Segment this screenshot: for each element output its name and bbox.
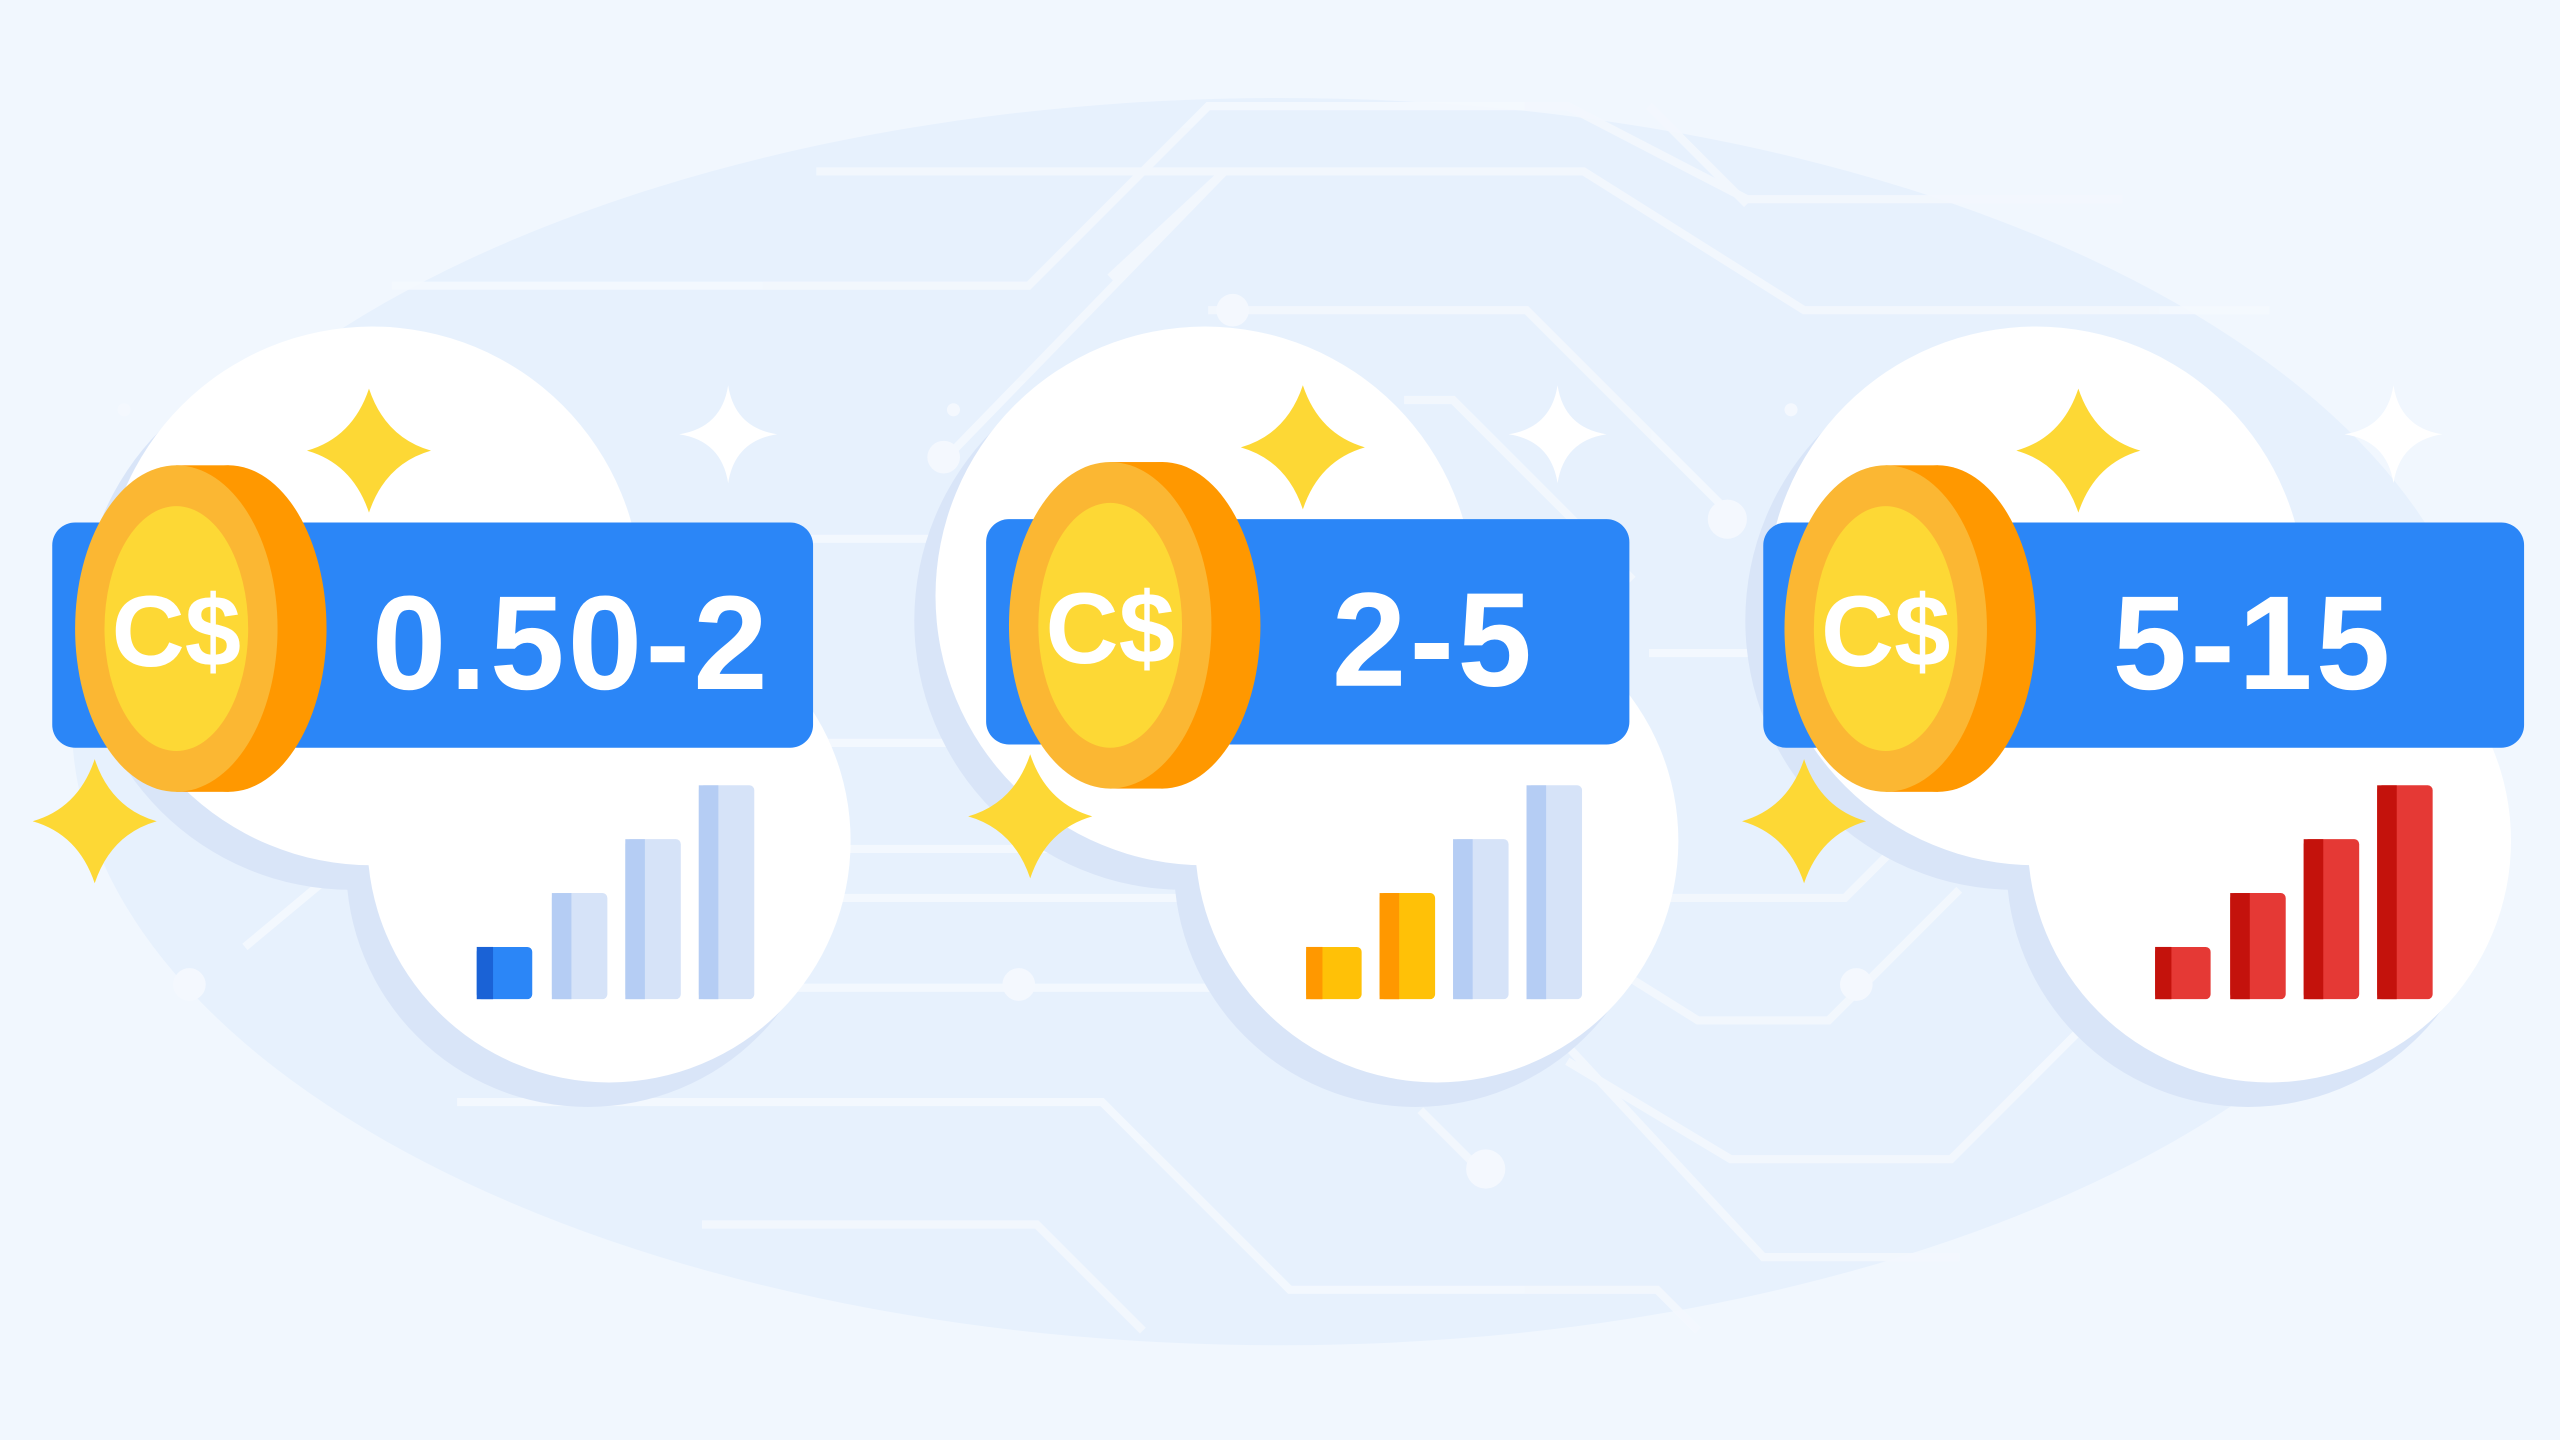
icon: coin [75, 465, 327, 792]
panel: C$2-5 [914, 327, 1678, 1107]
amount: 5-15 [2113, 569, 2394, 718]
panel: C$5-15 [1745, 327, 2524, 1107]
amount: 2-5 [1332, 566, 1535, 715]
icon: sparkles [33, 385, 2140, 883]
amount: 0.50-2 [372, 569, 771, 718]
icon: coin: C$ [1046, 572, 1175, 685]
bar chart [2155, 785, 2433, 999]
icon: coin: C$ [1821, 575, 1950, 688]
banner [52, 522, 813, 748]
bar chart [1306, 785, 1582, 999]
bar chart [477, 785, 754, 999]
icon: coin [1784, 465, 2036, 792]
banner [1763, 522, 2524, 748]
banner [986, 519, 1629, 744]
icon: coin [1009, 462, 1260, 789]
icon: white sparkles [679, 385, 2442, 483]
icon: coin: C$ [112, 575, 241, 688]
panel: C$0.50-2 [52, 327, 851, 1107]
